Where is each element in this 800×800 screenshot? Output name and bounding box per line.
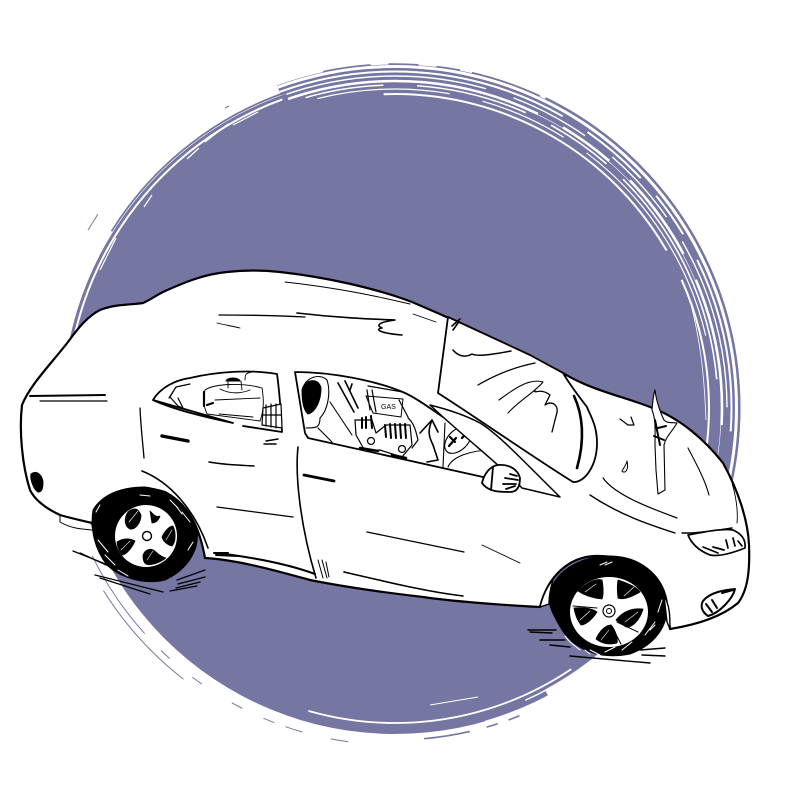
GAS box: GAS bbox=[381, 404, 396, 411]
front wheel bbox=[528, 556, 667, 663]
rear rim cut-outs bbox=[117, 509, 175, 565]
rear rim bbox=[115, 505, 177, 567]
ground shadow front bbox=[528, 630, 665, 663]
headlight bbox=[688, 530, 745, 555]
sill dashes bbox=[214, 553, 238, 556]
front hub bbox=[603, 605, 615, 617]
front spoke accents bbox=[573, 606, 638, 644]
ground shadow rear bbox=[73, 551, 205, 594]
rear rim hatching bbox=[121, 511, 172, 560]
wiper blade bbox=[652, 390, 677, 494]
fuel tank in rear seat bbox=[204, 372, 263, 421]
mirror trim dashes bbox=[264, 439, 278, 444]
seat fragment and pillar hatch bbox=[420, 420, 438, 462]
hood droplet bbox=[622, 461, 628, 472]
GAS box bbox=[366, 386, 408, 417]
rear tail light bbox=[31, 472, 43, 492]
front rim hatching bbox=[580, 584, 638, 640]
rear wheel bbox=[73, 487, 205, 594]
side mirror bbox=[482, 465, 520, 492]
fog lamp bbox=[702, 589, 735, 616]
driver seat bbox=[302, 377, 358, 442]
rear crate bbox=[262, 404, 282, 428]
engine parts cluster bbox=[355, 416, 418, 458]
rear window bbox=[153, 371, 282, 432]
rear door handle bbox=[162, 436, 188, 441]
front tyre bbox=[549, 556, 667, 656]
steering wheel bbox=[440, 422, 493, 467]
A pillar strip bbox=[430, 405, 560, 497]
front door handle bbox=[304, 475, 334, 481]
seat headrest sketch bbox=[169, 384, 190, 408]
windshield bbox=[438, 317, 597, 482]
front rim bbox=[570, 577, 648, 647]
roof and side lines bbox=[30, 282, 737, 596]
front arch lip bbox=[540, 580, 670, 629]
car bbox=[21, 270, 749, 663]
brush circle background bbox=[50, 63, 740, 753]
front window bbox=[295, 372, 518, 477]
front rim cut-outs bbox=[574, 580, 643, 644]
car body bbox=[21, 270, 749, 629]
rear hub bbox=[142, 532, 152, 540]
hood marks bbox=[620, 417, 634, 425]
rear tyre bbox=[92, 487, 197, 582]
